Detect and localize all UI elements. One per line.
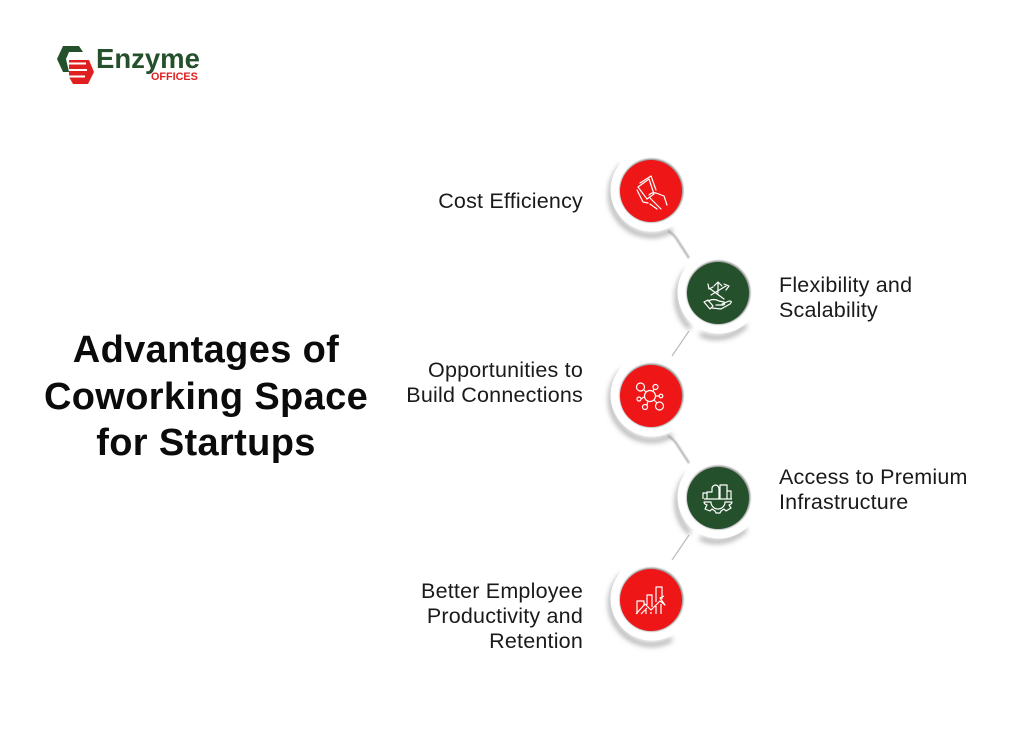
label: access to premium infrastructure [779, 465, 968, 514]
connector: green to red [672, 331, 689, 356]
label: opportunities to build connections: Build Connections [406, 383, 583, 407]
icon: growth chart [636, 587, 665, 614]
node 4: infrastructure [677, 456, 760, 541]
logo [57, 43, 200, 84]
connector: green to red lower [672, 535, 689, 560]
logo wordmark: Enzyme [96, 43, 200, 74]
label: better employee productivity and retention: Productivity and [427, 604, 583, 628]
title [44, 329, 368, 464]
node 5: productivity [610, 558, 694, 645]
title: Coworking Space [44, 376, 368, 418]
node 2: flexibility [677, 250, 760, 337]
node 1: cost efficiency [610, 148, 694, 236]
title: for Startups [96, 422, 316, 464]
label: better employee productivity and retention: Better Employee [421, 579, 583, 603]
logo mark [57, 46, 94, 84]
label: better employee productivity and retention [421, 579, 583, 653]
label: access to premium infrastructure: Access to Premium [779, 465, 968, 489]
icon: buildings on gear [703, 485, 732, 513]
node 3: connections [610, 354, 694, 441]
icon: hand holding money [637, 176, 667, 209]
icon: network of people [636, 383, 664, 410]
logo subtitle: OFFICES [151, 71, 198, 83]
label: flexibility and scalability: Scalability [779, 298, 878, 322]
label: opportunities to build connections [406, 358, 583, 407]
label: flexibility and scalability: Flexibility and [779, 273, 912, 297]
label: opportunities to build connections: Opportunities to [428, 358, 583, 382]
icon: hand with arrows [704, 282, 731, 309]
label: cost efficiency: Cost Efficiency [438, 189, 583, 213]
label: better employee productivity and retention: Retention [489, 629, 583, 653]
connector: red to green [668, 231, 689, 258]
title: Advantages of [73, 329, 339, 371]
label: flexibility and scalability [779, 273, 912, 322]
connector: red to green lower [668, 436, 689, 463]
label: access to premium infrastructure: Infrastructure [779, 490, 908, 514]
